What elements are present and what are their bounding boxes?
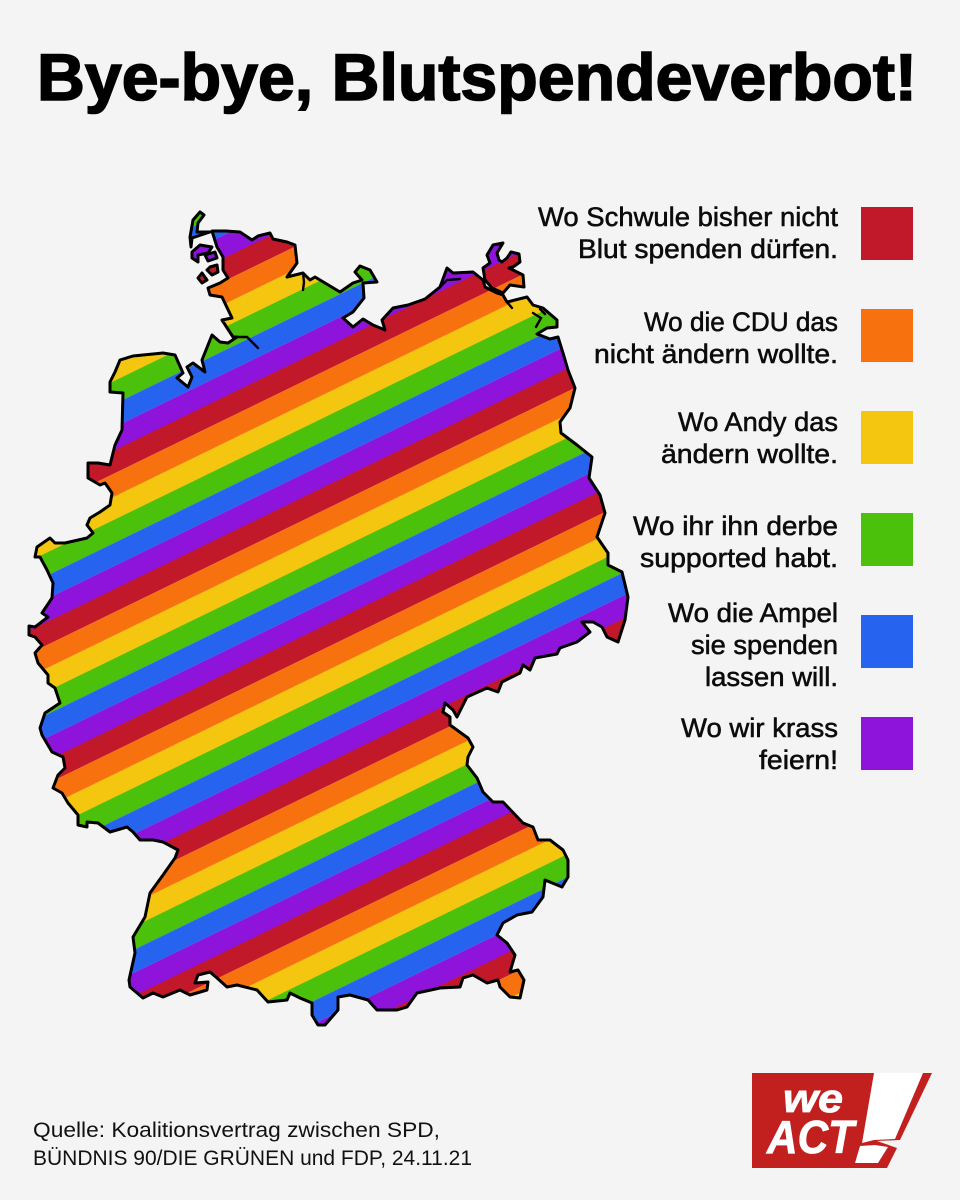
legend item: blue — [668, 598, 913, 692]
legend item: yellow — [661, 407, 913, 469]
legend item: red: Wo Schwule bisher nicht — [538, 202, 839, 232]
source note: Quelle: Koalitionsvertrag zwischen SPD, — [33, 1118, 440, 1142]
legend item: orange: nicht ändern wollte. — [594, 339, 838, 369]
legend item: green: Wo ihr ihn derbe — [633, 511, 838, 541]
legend item: purple: feiern! — [759, 745, 838, 775]
legend item: purple: Wo wir krass — [681, 713, 838, 743]
legend item: orange: Wo die CDU das — [644, 307, 838, 337]
legend item: red: Blut spenden dürfen. — [578, 234, 838, 264]
logo: weACT!: we — [783, 1077, 843, 1121]
legend item: yellow: Wo Andy das — [678, 407, 838, 437]
legend item: blue: Wo die Ampel — [668, 598, 838, 628]
legend item: orange — [594, 307, 913, 369]
logo: weACT! — [752, 1073, 932, 1168]
source note — [33, 1118, 472, 1170]
map of Germany with rainbow stripes — [29, 212, 628, 1025]
legend item: yellow: ändern wollte. — [661, 439, 838, 469]
legend item: green — [633, 511, 913, 573]
title: Bye-bye, Blutspendeverbot! — [37, 40, 917, 114]
legend item: purple — [681, 713, 913, 775]
legend item: red — [538, 202, 913, 264]
legend — [538, 202, 913, 775]
legend item: blue: sie spenden — [691, 630, 838, 660]
legend item: blue: lassen will. — [705, 662, 838, 692]
legend item: green: supported habt. — [640, 543, 838, 573]
logo: weACT!: ACT — [766, 1111, 858, 1163]
source note: BÜNDNIS 90/DIE GRÜNEN und FDP, 24.11.21 — [33, 1146, 472, 1170]
